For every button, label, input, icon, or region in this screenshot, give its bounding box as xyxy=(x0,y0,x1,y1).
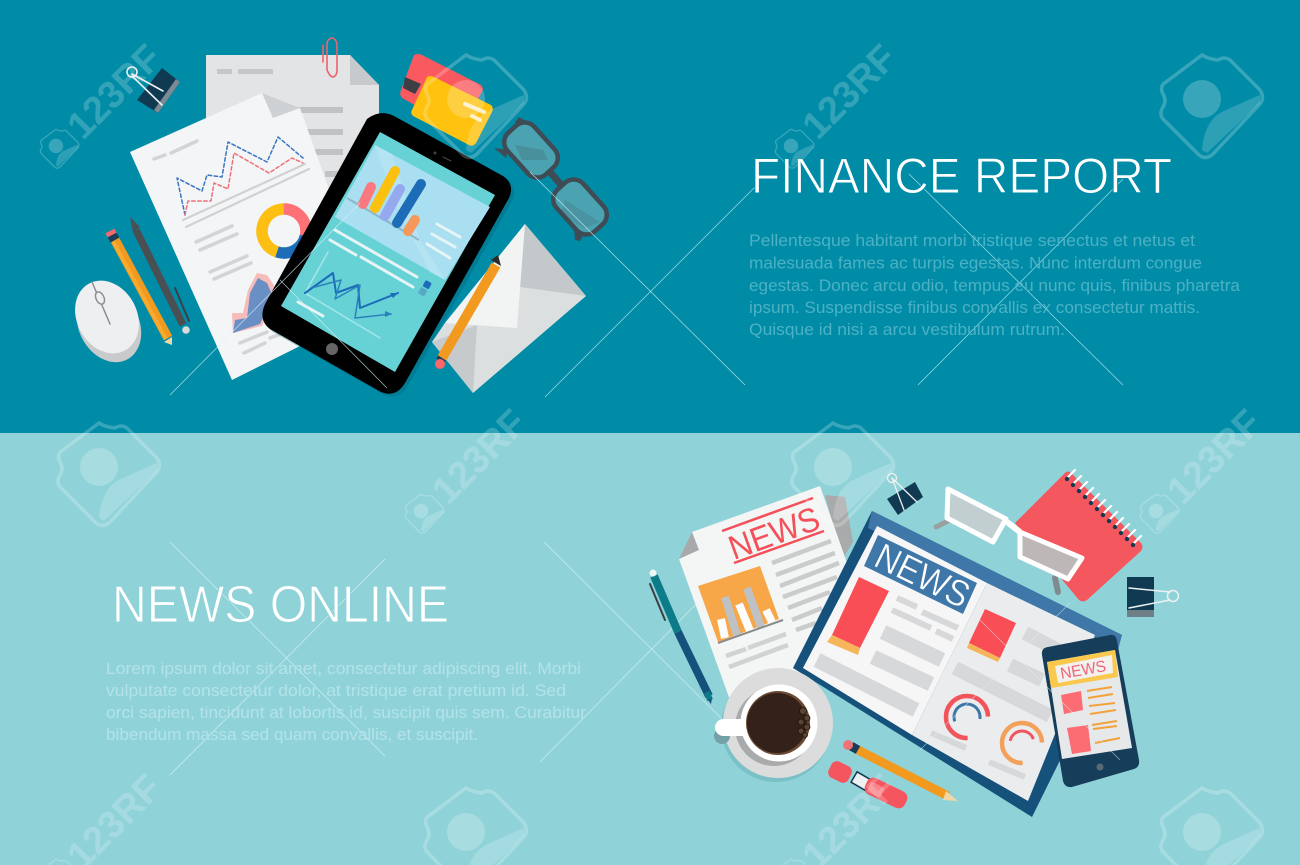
panel: finance report xyxy=(0,0,1300,433)
magazine left photo xyxy=(827,577,889,655)
title: news online: NEWS ONLINE xyxy=(112,576,449,634)
magazine right text blocks xyxy=(955,633,1058,716)
magazine right photo xyxy=(967,609,1016,662)
front report sheet xyxy=(130,93,372,380)
magazine banner: NEWS xyxy=(869,535,976,616)
newspaper masthead: NEWS xyxy=(724,500,825,568)
ring chart one xyxy=(931,696,988,748)
ring chart two xyxy=(989,723,1042,777)
text block: finance description: malesuada fames ac turpis egestas. Nunc interdum congue xyxy=(749,254,1202,272)
icon: credit cards xyxy=(400,54,493,146)
icon: binder clip xyxy=(127,67,180,113)
newspaper text lines xyxy=(772,541,839,630)
icon: mouse xyxy=(63,269,154,374)
phone screen xyxy=(1047,650,1132,759)
phone screen: NEWS xyxy=(1059,658,1107,683)
text lines xyxy=(196,226,287,353)
extra thin lines over news xyxy=(920,603,1120,760)
title: finance report: FINANCE REPORT xyxy=(751,148,1172,204)
tablet xyxy=(262,113,514,397)
icon: glasses xyxy=(494,117,612,241)
phone xyxy=(1042,635,1139,787)
line chart xyxy=(177,137,309,227)
back sheet of paper xyxy=(206,55,379,230)
magazine pages xyxy=(803,526,987,735)
watermark: 123RF logos: 123RF xyxy=(795,37,905,147)
text block: news description: vulputate consectetur dolor, at tristique erat pretium id. Sed xyxy=(106,681,566,700)
icon: white glasses xyxy=(936,489,1082,592)
text block: news description xyxy=(106,659,586,744)
decorative thin lines news xyxy=(170,542,723,775)
text block: news description: orci sapien, tincidunt at lobortis id, suscipit quis sem. Curabitur xyxy=(106,703,586,722)
icon: orange pencil xyxy=(110,231,172,345)
icon: usb drive xyxy=(826,759,910,811)
decorative thin lines finance xyxy=(545,174,1125,397)
newspaper xyxy=(679,486,860,700)
icon: pencil on envelope xyxy=(435,255,501,369)
bar chart xyxy=(363,171,421,231)
icon: red notebook xyxy=(1015,470,1142,602)
icon: binder clip top xyxy=(887,474,923,515)
line graph xyxy=(305,252,398,338)
icon: envelope xyxy=(432,224,586,393)
magazine left text blocks xyxy=(892,598,958,639)
text block: finance description: Quisque id nisi a arcu vestibulum rutrum. xyxy=(749,320,1065,339)
icon: pen xyxy=(130,217,190,334)
text block: finance description: egestas. Donec arcu odio, tempus eu nunc quis, finibus pharetra xyxy=(749,276,1241,295)
panel: news online xyxy=(0,433,1300,865)
area chart xyxy=(232,273,277,333)
icon: pencil xyxy=(843,740,958,801)
newspaper bar chart xyxy=(698,566,783,643)
text block: news description: bibendum massa sed quam convallis, et suscipit. xyxy=(106,725,478,744)
header lines xyxy=(154,141,197,159)
magazine xyxy=(793,511,1122,817)
tablet screen xyxy=(281,132,495,372)
icon: teal pen xyxy=(650,570,712,704)
text block: finance description: ipsum. Suspendisse finibus convallis ex consectetur mattis. xyxy=(749,298,1200,317)
watermark: 123RF logos: 123RF xyxy=(60,37,170,147)
text block: finance description: Pellentesque habitant morbi tristique senectus et netus et xyxy=(749,231,1195,250)
text block: finance description xyxy=(749,231,1241,339)
tablet controls xyxy=(326,343,338,355)
watermark: 123RF logos: 123RF xyxy=(1160,402,1270,512)
icon: binder clip right xyxy=(1127,577,1178,617)
icon: paper clip xyxy=(323,38,337,77)
tablet crossing lines xyxy=(170,172,745,395)
text block: news description: Lorem ipsum dolor sit amet, consectetur adipiscing elit. Morbi xyxy=(106,659,581,678)
donut chart xyxy=(256,203,312,259)
icon: coffee cup xyxy=(714,668,833,782)
watermark: 123RF logos: 123RF xyxy=(425,402,535,512)
screen text lines xyxy=(298,224,460,316)
